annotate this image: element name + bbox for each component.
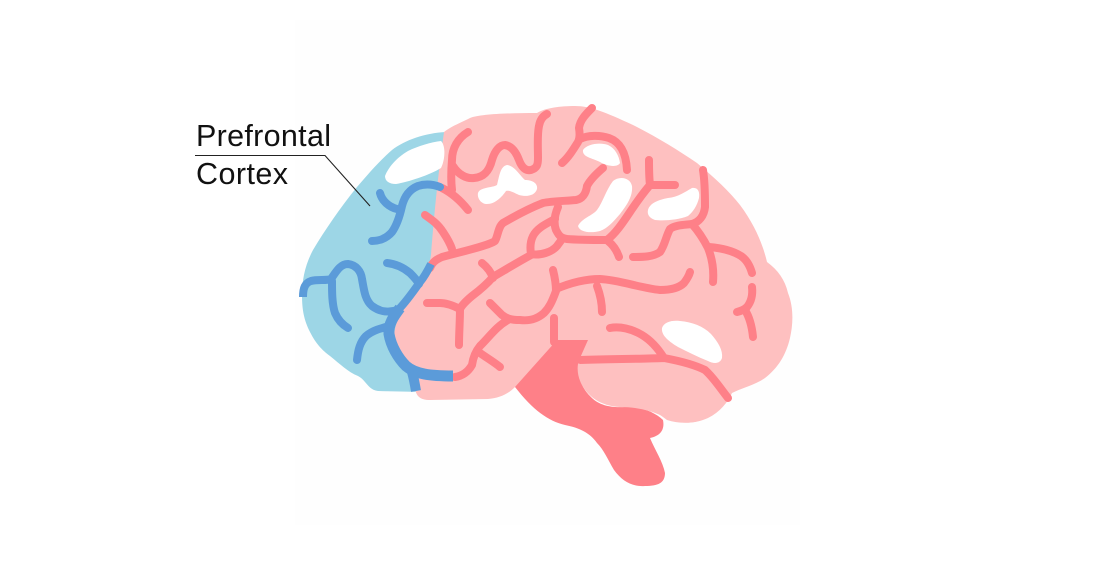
brain stem and cerebellum xyxy=(515,340,665,486)
prefrontal cortex region xyxy=(302,132,446,392)
salmon sulci veins xyxy=(425,108,753,398)
temporal lobe xyxy=(578,360,728,423)
pink cerebrum xyxy=(394,106,792,423)
label text: Cortex: Cortex xyxy=(196,157,288,191)
blue sulci veins xyxy=(303,185,453,391)
white gaps xyxy=(385,141,722,363)
label text: Prefrontal: Prefrontal xyxy=(196,119,331,153)
label: Prefrontal Cortex xyxy=(195,119,370,206)
leader line xyxy=(195,156,370,206)
brain illustration xyxy=(302,106,792,486)
